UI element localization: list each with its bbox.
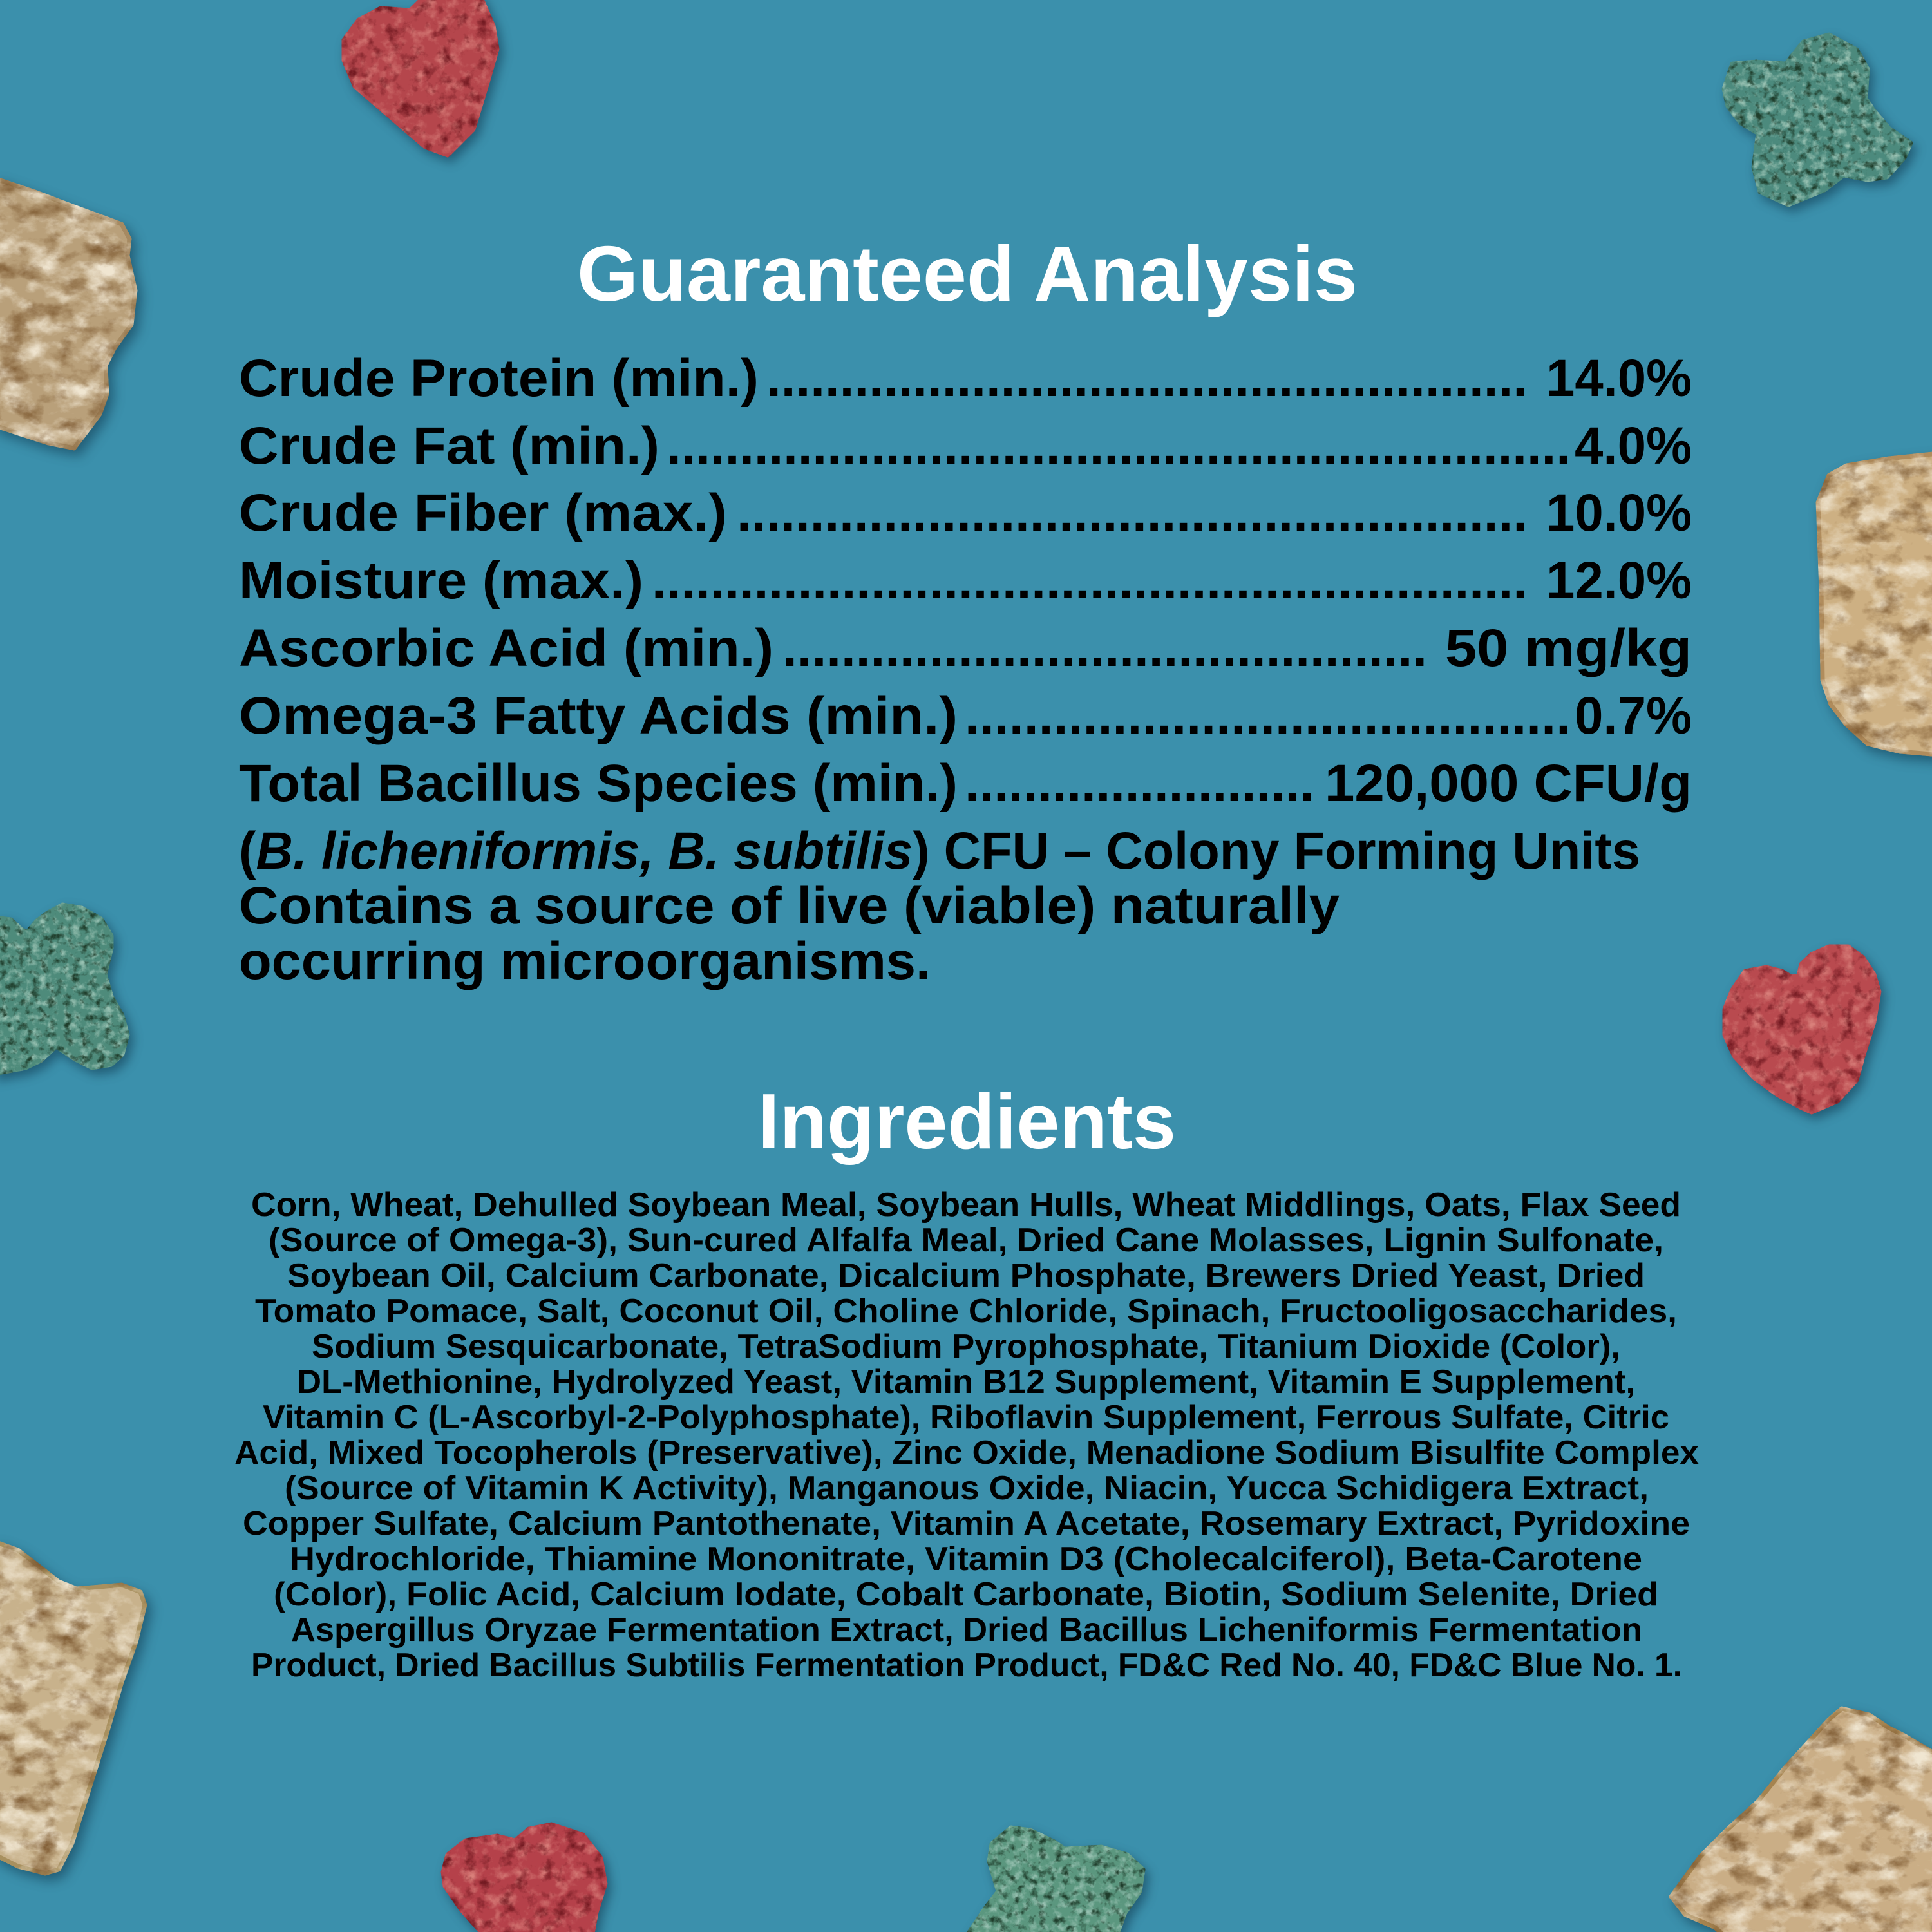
row: crude fiber — [239, 484, 1692, 542]
row: ascorbic acid: ............................................ — [782, 619, 1427, 677]
row: omega-3: 0.7% — [1575, 687, 1692, 745]
note: species and CFU definition: (B. licheniformis, B. subtilis) CFU – Colony Forming Units — [239, 822, 1640, 880]
ingredients list: Soybean Oil, Calcium Carbonate, Dicalcium Phosphate, Brewers Dried Yeast, Dried — [287, 1257, 1645, 1294]
row: total bacillus: ........................ — [965, 754, 1314, 813]
heading: Ingredients: Ingredients — [758, 1077, 1176, 1165]
ingredients list: Acid, Mixed Tocopherols (Preservative), Zinc Oxide, Menadione Sodium Bisulfite Complex — [234, 1434, 1699, 1472]
row: omega-3: Omega-3 Fatty Acids (min.) — [239, 687, 958, 745]
row: total bacillus: 120,000 CFU/g — [1325, 754, 1692, 813]
row: ascorbic acid: Ascorbic Acid (min.) — [239, 619, 773, 677]
row: crude fat: .............................................................. — [667, 417, 1571, 475]
row: moisture: 12.0% — [1546, 551, 1692, 610]
kibble: tan biscuit, lower left — [0, 1542, 145, 1873]
row: crude protein — [239, 349, 1692, 408]
kibble: tan biscuit, upper left — [0, 178, 135, 448]
analysis table — [239, 349, 1692, 813]
row: moisture: Moisture (max.) — [239, 551, 643, 610]
ingredients list — [234, 1186, 1699, 1684]
row: crude fiber: ...................................................... — [737, 484, 1528, 542]
ingredients list: Aspergillus Oryzae Fermentation Extract, Dried Bacillus Licheniformis Fermentation — [291, 1611, 1642, 1649]
heading: Guaranteed Analysis: Guaranteed Analysis — [577, 230, 1358, 317]
ingredients list: Product, Dried Bacillus Subtilis Fermentation Product, FD&C Red No. 40, FD&C Blue No. 1. — [251, 1647, 1682, 1684]
row: crude protein: .................................................... — [766, 349, 1528, 408]
row: crude fat: Crude Fat (min.) — [239, 417, 659, 475]
kibble: red heart, top — [344, 0, 497, 155]
ingredients list: Copper Sulfate, Calcium Pantothenate, Vitamin A Acetate, Rosemary Extract, Pyridoxine — [243, 1505, 1690, 1542]
ingredients list: Corn, Wheat, Dehulled Soybean Meal, Soybean Hulls, Wheat Middlings, Oats, Flax Seed — [251, 1186, 1681, 1224]
row: total bacillus — [239, 754, 1692, 813]
kibble: green cross, left — [0, 905, 128, 1074]
note: live microorganisms line 1: Contains a source of live (viable) naturally — [239, 876, 1340, 935]
row: total bacillus: Total Bacillus Species (min.) — [239, 754, 958, 813]
ingredients list: (Source of Vitamin K Activity), Manganous Oxide, Niacin, Yucca Schidigera Extract, — [285, 1470, 1649, 1507]
row: crude fiber: Crude Fiber (max.) — [239, 484, 727, 542]
note: live microorganisms line 2: occurring microorganisms. — [239, 932, 931, 990]
ingredients list: Sodium Sesquicarbonate, TetraSodium Pyrophosphate, Titanium Dioxide (Color), — [312, 1328, 1620, 1365]
row: ascorbic acid — [239, 619, 1692, 677]
ingredients list: (Source of Omega-3), Sun-cured Alfalfa Meal, Dried Cane Molasses, Lignin Sulfonate, — [269, 1222, 1663, 1259]
kibble: red heart, right — [1725, 947, 1879, 1112]
kibble: tan biscuit, lower right — [1671, 1709, 1932, 1932]
row: omega-3 — [239, 687, 1692, 745]
row: crude fat — [239, 417, 1692, 475]
kibble: green cross, bottom — [966, 1828, 1143, 1932]
row: ascorbic acid: 50 mg/kg — [1445, 619, 1692, 677]
row: crude protein: Crude Protein (min.) — [239, 349, 759, 408]
ingredients list: DL-Methionine, Hydrolyzed Yeast, Vitamin B12 Supplement, Vitamin E Supplement, — [297, 1363, 1635, 1401]
kibble: tan biscuit, right — [1818, 453, 1932, 755]
ingredients list: Vitamin C (L-Ascorbyl-2-Polyphosphate), Riboflavin Supplement, Ferrous Sulfate, Citric — [263, 1399, 1669, 1436]
ingredients list: Hydrochloride, Thiamine Mononitrate, Vitamin D3 (Cholecalciferol), Beta-Carotene — [290, 1540, 1642, 1578]
row: crude fiber: 10.0% — [1546, 484, 1692, 542]
row: moisture: ............................................................ — [652, 551, 1528, 610]
kibble: red heart, bottom — [443, 1824, 605, 1932]
ingredients list: (Color), Folic Acid, Calcium Iodate, Cobalt Carbonate, Biotin, Sodium Selenite, Dried — [274, 1576, 1658, 1613]
row: omega-3: ......................................... — [965, 687, 1571, 745]
row: crude protein: 14.0% — [1546, 349, 1692, 408]
row: moisture — [239, 551, 1692, 610]
ingredients list: Tomato Pomace, Salt, Coconut Oil, Choline Chloride, Spinach, Fructooligosaccharides, — [255, 1293, 1677, 1330]
kibble: green cross, top right — [1724, 35, 1911, 205]
row: crude fat: 4.0% — [1575, 417, 1692, 475]
